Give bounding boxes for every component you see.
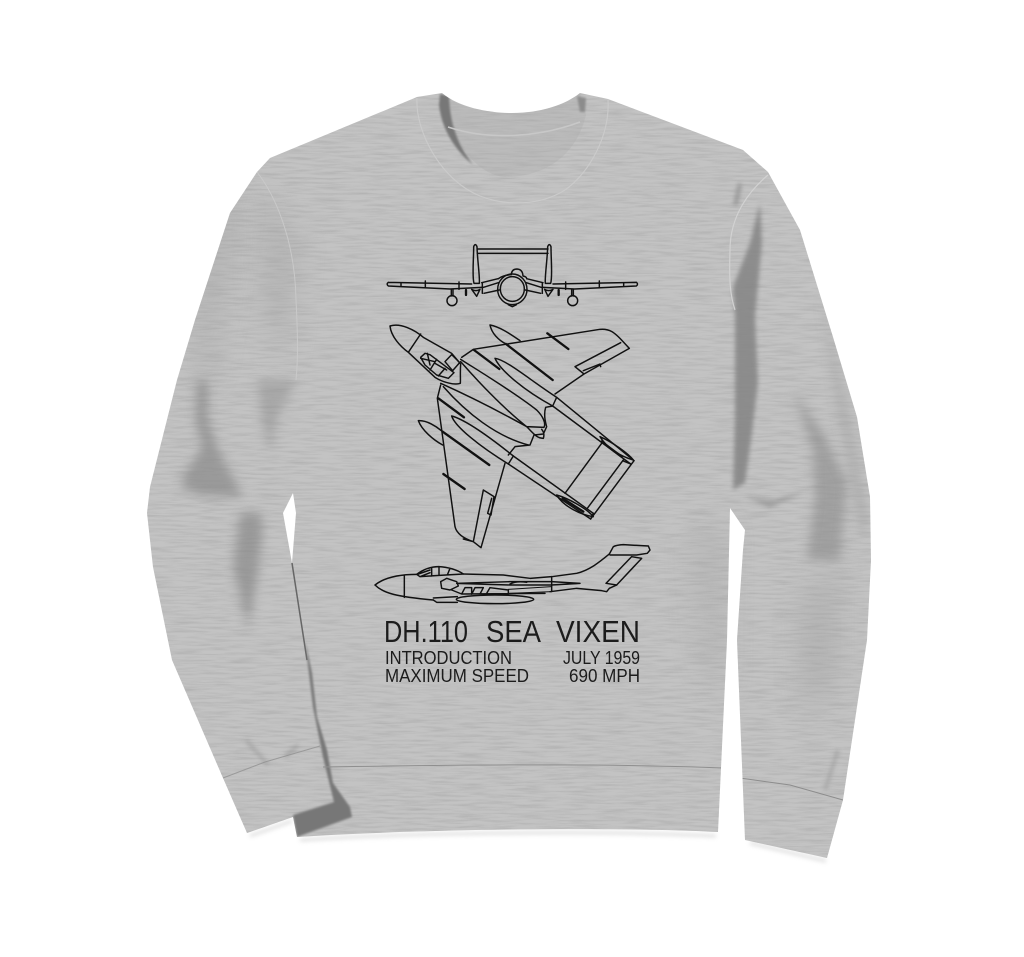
sleeve seams xyxy=(257,172,298,380)
body-sleeve contact line xyxy=(292,563,307,660)
product image: sweatshirt with aircraft print xyxy=(147,93,871,863)
left underarm white sliver xyxy=(283,493,296,563)
lower wing drop tank and missile xyxy=(418,416,513,464)
title: SEA xyxy=(486,614,541,649)
upper wing xyxy=(462,329,629,394)
right sleeve folds xyxy=(793,390,847,560)
aircraft top view xyxy=(390,325,634,548)
title: DH.110 xyxy=(384,614,468,649)
nose and forward fuselage xyxy=(390,325,461,384)
collar shadow xyxy=(439,94,473,165)
specifications: MAXIMUM SPEED xyxy=(385,665,529,686)
aircraft front view xyxy=(387,245,637,307)
tail booms xyxy=(508,397,634,519)
left sleeve overlap shadow xyxy=(293,640,352,837)
lower wing xyxy=(437,385,505,548)
specifications xyxy=(385,647,640,686)
upper wing drop tank and missile xyxy=(490,325,557,406)
collar seam xyxy=(417,98,608,203)
specifications: 690 MPH xyxy=(569,665,640,686)
engine boom xyxy=(457,582,580,585)
neck tape xyxy=(448,122,580,136)
edge shadow below hem xyxy=(250,821,826,861)
central fuselage fairings xyxy=(441,359,545,445)
tail fin xyxy=(606,545,650,585)
canopy xyxy=(417,567,463,577)
right armhole shadow xyxy=(733,203,762,490)
back of neck interior xyxy=(441,93,586,177)
intake xyxy=(441,578,458,590)
boom fairings xyxy=(557,437,633,517)
title xyxy=(384,614,640,649)
hem and cuff seams xyxy=(323,765,723,768)
fuselage outline xyxy=(375,554,617,600)
spec text block xyxy=(384,614,640,686)
sweatshirt xyxy=(147,93,871,863)
tailplane xyxy=(565,443,634,519)
aircraft side view xyxy=(375,545,650,604)
canopy xyxy=(421,353,454,378)
wheel bays xyxy=(452,588,545,594)
title: VIXEN xyxy=(556,614,640,649)
specifications: INTRODUCTION xyxy=(385,647,512,668)
cuff crease xyxy=(246,740,838,790)
left sleeve folds xyxy=(180,380,243,497)
drop tank xyxy=(456,595,534,604)
specifications: JULY 1959 xyxy=(563,647,640,668)
